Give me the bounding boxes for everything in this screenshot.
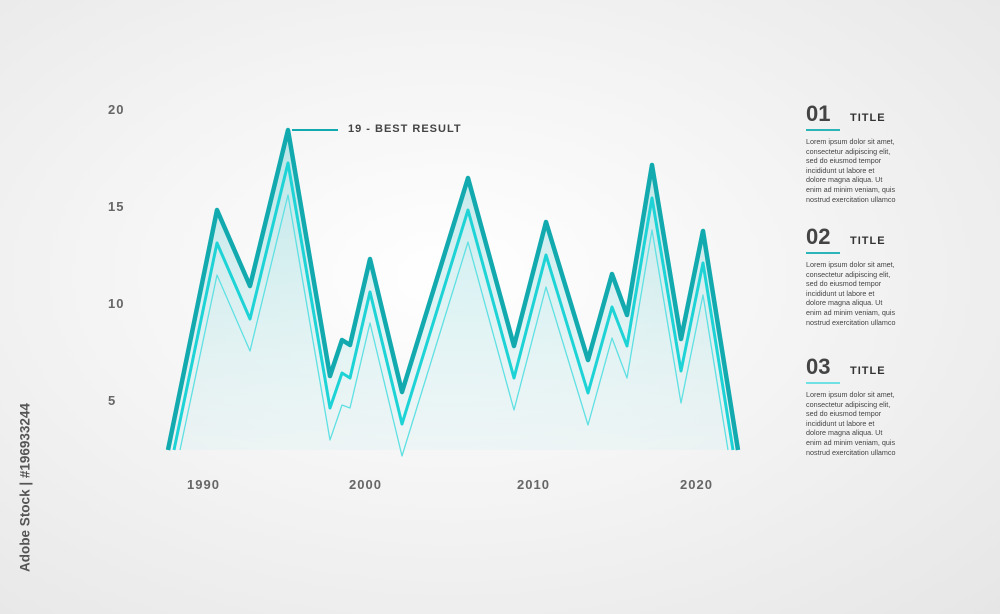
block 02: dolore magna aliqua. Ut <box>806 298 882 307</box>
block 02: sed do eiusmod tempor <box>806 279 881 288</box>
block 03: consectetur adipiscing elit, <box>806 400 890 409</box>
block 02: incididunt ut labore et <box>806 289 874 298</box>
block 02: 02 <box>806 224 830 249</box>
block 01: consectetur adipiscing elit, <box>806 147 890 156</box>
block 01: TITLE <box>850 112 886 124</box>
line: light <box>180 195 728 456</box>
block 01: Lorem ipsum dolor sit amet, <box>806 137 895 146</box>
text: 2000 <box>349 477 382 492</box>
block 02: TITLE <box>850 235 886 247</box>
block 02: nostrud exercitation ullamco <box>806 318 896 327</box>
block 02: consectetur adipiscing elit, <box>806 270 890 279</box>
block 03: nostrud exercitation ullamco <box>806 448 896 457</box>
block 01: enim ad minim veniam, quis <box>806 185 895 194</box>
text: 2010 <box>517 477 550 492</box>
block 01: 01 <box>806 101 830 126</box>
text: 5 <box>108 393 116 408</box>
block 03: enim ad minim veniam, quis <box>806 438 895 447</box>
area fill <box>168 130 738 450</box>
block 01: sed do eiusmod tempor <box>806 156 881 165</box>
block 03: Lorem ipsum dolor sit amet, <box>806 390 895 399</box>
block 03: TITLE <box>850 365 886 377</box>
block 03: incididunt ut labore et <box>806 419 874 428</box>
block 03 <box>806 354 896 457</box>
block 02 <box>806 224 896 327</box>
text: 10 <box>108 296 124 311</box>
text: 2020 <box>680 477 713 492</box>
callout label: 19 - BEST RESULT <box>348 123 462 135</box>
block 02: enim ad minim veniam, quis <box>806 308 895 317</box>
block 01 <box>806 101 896 204</box>
block 02: Lorem ipsum dolor sit amet, <box>806 260 895 269</box>
line: main <box>168 130 738 450</box>
watermark side text: Adobe Stock | #196933244 <box>18 403 32 572</box>
block 01: dolore magna aliqua. Ut <box>806 175 882 184</box>
callout line <box>292 129 338 131</box>
block 03: sed do eiusmod tempor <box>806 409 881 418</box>
y axis labels: 20 <box>108 102 124 117</box>
block 01: nostrud exercitation ullamco <box>806 195 896 204</box>
block 03: 03 <box>806 354 830 379</box>
text: 15 <box>108 199 124 214</box>
block 01: incididunt ut labore et <box>806 166 874 175</box>
block 03: dolore magna aliqua. Ut <box>806 428 882 437</box>
x axis labels: 1990 <box>187 477 220 492</box>
line: middle <box>174 163 733 450</box>
